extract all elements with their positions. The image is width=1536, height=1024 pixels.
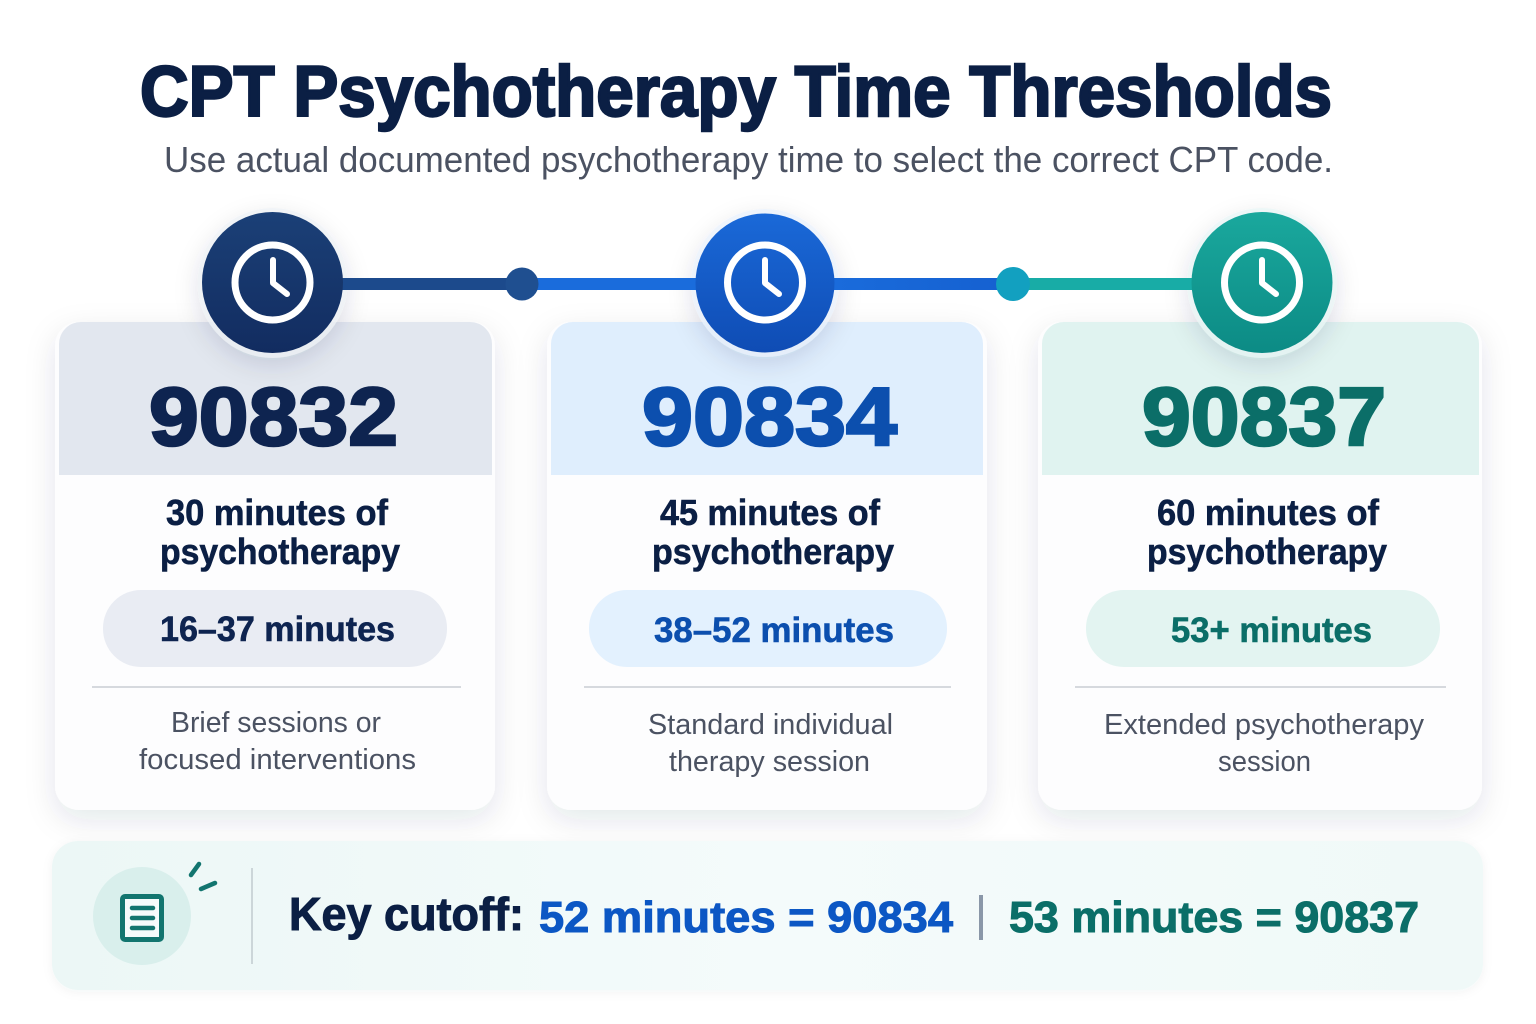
cutoff: 52 minutes: 52 minutes = 90834	[539, 893, 954, 942]
session length: 45 minutes: 45 minutes of	[660, 492, 881, 533]
cutoff: 53 minutes: 53 minutes = 90837	[1009, 893, 1419, 942]
session length: 60 minutes	[1147, 492, 1387, 572]
icon: clock 3	[1192, 212, 1332, 353]
description: brief sessions	[139, 707, 416, 776]
title: CPT Psychotherapy Time Thresholds	[140, 53, 1332, 132]
panel: key cutoff bar	[52, 841, 1483, 990]
session length: 30 minutes: 30 minutes of	[166, 492, 389, 533]
icon: document	[93, 864, 215, 965]
card header: 90832	[59, 322, 492, 475]
icon: clock 1	[202, 212, 343, 353]
timeline connector	[330, 267, 1205, 301]
icon: clock 2	[696, 214, 834, 352]
key cutoff label: Key cutoff:	[289, 888, 524, 940]
card header: 90834	[551, 322, 983, 475]
time range pill: 38–52 minutes	[589, 590, 947, 667]
session length: 45 minutes	[652, 492, 894, 572]
panel: 90837 card	[1038, 322, 1482, 810]
session length: 45 minutes: psychotherapy	[652, 531, 894, 572]
time range pill: 53+ minutes: 53+ minutes	[1171, 611, 1372, 650]
subtitle: Use actual documented psychotherapy time to select the correct CPT code.	[164, 139, 1333, 180]
description: brief sessions: Brief sessions or	[171, 707, 381, 739]
description: standard session: Standard individual	[648, 709, 893, 741]
panel: 90834 card	[547, 322, 987, 810]
time range pill: 38–52 minutes: 38–52 minutes	[654, 611, 894, 650]
time range pill: 16–37 minutes: 16–37 minutes	[160, 610, 395, 649]
session length: 60 minutes: 60 minutes of	[1157, 492, 1380, 533]
session length: 60 minutes: psychotherapy	[1147, 531, 1387, 572]
description: extended session	[1104, 709, 1424, 778]
panel: 90832 card	[55, 322, 495, 810]
description: standard session	[648, 709, 893, 778]
session length: 30 minutes	[160, 492, 400, 572]
code: 90834: 90834	[642, 370, 897, 463]
code: 90832: 90832	[149, 370, 398, 463]
time range pill: 16–37 minutes	[103, 590, 447, 667]
description: brief sessions: focused interventions	[139, 744, 416, 776]
description: extended session: Extended psychotherapy	[1104, 709, 1424, 741]
code: 90837: 90837	[1142, 370, 1386, 463]
session length: 30 minutes: psychotherapy	[160, 531, 400, 572]
time range pill: 53+ minutes	[1086, 590, 1440, 667]
description: standard session: therapy session	[669, 746, 870, 778]
description: extended session: session	[1218, 746, 1311, 778]
card header: 90837	[1042, 322, 1479, 475]
